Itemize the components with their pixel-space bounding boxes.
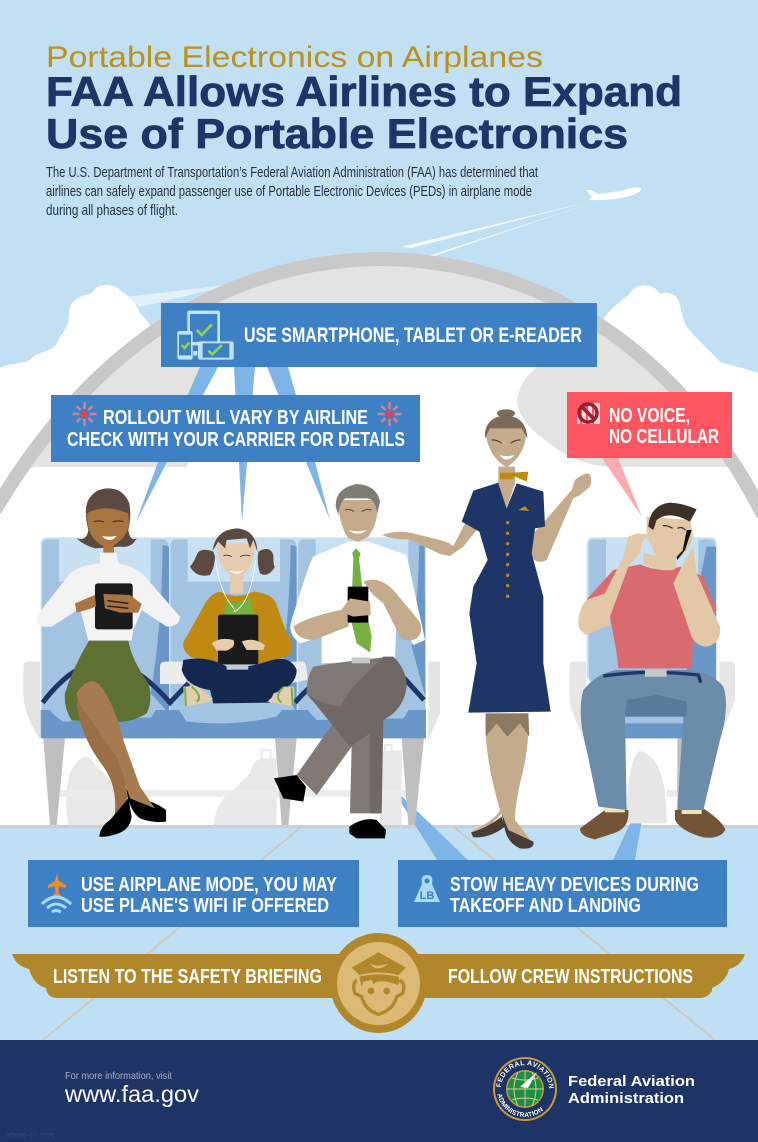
intro paragraph: during all phases of flight. — [46, 203, 178, 219]
text: Federal Aviation Administration: Federal Aviation — [568, 1074, 695, 1090]
icon: orange airplane — [48, 874, 66, 896]
label line 2: CHECK WITH YOUR CARRIER FOR DETAILS — [67, 429, 405, 451]
arm reaching left across seats — [382, 532, 450, 556]
icon: prohibited cell signal — [577, 403, 600, 424]
logo: FAA seal: ADMINISTRATION — [497, 1094, 543, 1118]
floor — [0, 825, 758, 1040]
heading: main title line 2: Use of Portable Electronics — [46, 110, 628, 157]
label: listen to the safety briefing: LISTEN TO THE SAFETY BRIEFING — [53, 966, 322, 988]
icon: right alert burst — [378, 402, 402, 426]
text: website: www.faa.gov — [64, 1081, 200, 1107]
background: clouds and cabin white wall — [0, 285, 758, 826]
logo: FAA seal — [493, 1057, 557, 1121]
icon: airplane in sky — [586, 187, 641, 200]
passenger with phone — [578, 503, 726, 839]
text: for more information: For more information, visit — [65, 1070, 172, 1082]
heading: main title line 1: FAA Allows Airlines to Expand — [46, 68, 682, 115]
label line 1: ROLLOUT WILL VARY BY AIRLINE — [103, 407, 368, 429]
heading: kicker: Portable Electronics on Airplanes — [46, 41, 543, 74]
icon: wifi signal — [42, 897, 71, 912]
panel: use smartphone, tablet or e-reader — [161, 303, 597, 367]
icon: left alert burst — [72, 402, 96, 426]
passenger row: seats, woman, girl, man — [23, 484, 440, 838]
text: Federal Aviation Administration — [568, 1074, 695, 1107]
icon: LB weight: LB — [420, 890, 434, 902]
label: STOW HEAVY DEVICES DURING — [450, 874, 699, 896]
logo: FAA seal: FEDERAL AVIATION — [496, 1060, 554, 1088]
person: flight attendant and passenger on phone — [382, 409, 735, 849]
panel: rollout varies by airline — [51, 395, 420, 462]
text: Federal Aviation Administration: Administration — [568, 1091, 684, 1107]
passenger seat — [569, 537, 735, 823]
icon: pilot medallion — [330, 933, 427, 1033]
label: follow crew instructions: FOLLOW CREW INSTRUCTIONS — [448, 966, 693, 988]
panel: stow heavy devices: TAKEOFF AND LANDING — [450, 895, 641, 917]
icon: devices with check marks — [177, 311, 234, 360]
person: woman with tablet — [37, 488, 180, 837]
callout pointers from blue boxes to passengers — [136, 367, 648, 860]
text: document code: FO006-07-1025 — [5, 1133, 55, 1140]
panel: stow heavy devices — [398, 860, 727, 927]
panel: no voice, no cellular: NO CELLULAR — [609, 426, 719, 448]
panel: no voice, no cellular — [567, 392, 732, 458]
seat legs, bags and armrests — [23, 662, 440, 825]
icon: LB weight — [414, 875, 440, 902]
seat backs — [41, 537, 426, 738]
label: USE AIRPLANE MODE, YOU MAY — [81, 874, 338, 896]
label: USE SMARTPHONE, TABLET OR E-READER — [244, 324, 582, 347]
background: sky with plane and contrails — [125, 187, 641, 307]
footer band — [0, 1040, 758, 1142]
flight attendant — [440, 409, 591, 849]
panel: airplane mode and wifi — [28, 860, 359, 927]
seat belts — [43, 662, 424, 703]
person: girl with tablet and earphones — [182, 528, 297, 707]
title block — [46, 41, 682, 219]
person: man with smartphone — [274, 484, 425, 838]
callout pointer from red box — [602, 458, 642, 517]
background: cabin window grey bulkhead — [0, 259, 758, 515]
label: NO VOICE, — [609, 405, 690, 427]
intro paragraph: The U.S. Department of Transportation’s Federal Aviation Administration (FAA) has determined that — [46, 165, 538, 181]
panel: airplane mode and wifi: USE PLANE'S WIFI IF OFFERED — [81, 895, 329, 917]
banner: crew wings — [12, 933, 745, 1033]
intro paragraph — [46, 165, 538, 219]
intro paragraph: airlines can safely expand passenger use of Portable Electronic Devices (PEDs) in airplane mode — [46, 184, 532, 200]
